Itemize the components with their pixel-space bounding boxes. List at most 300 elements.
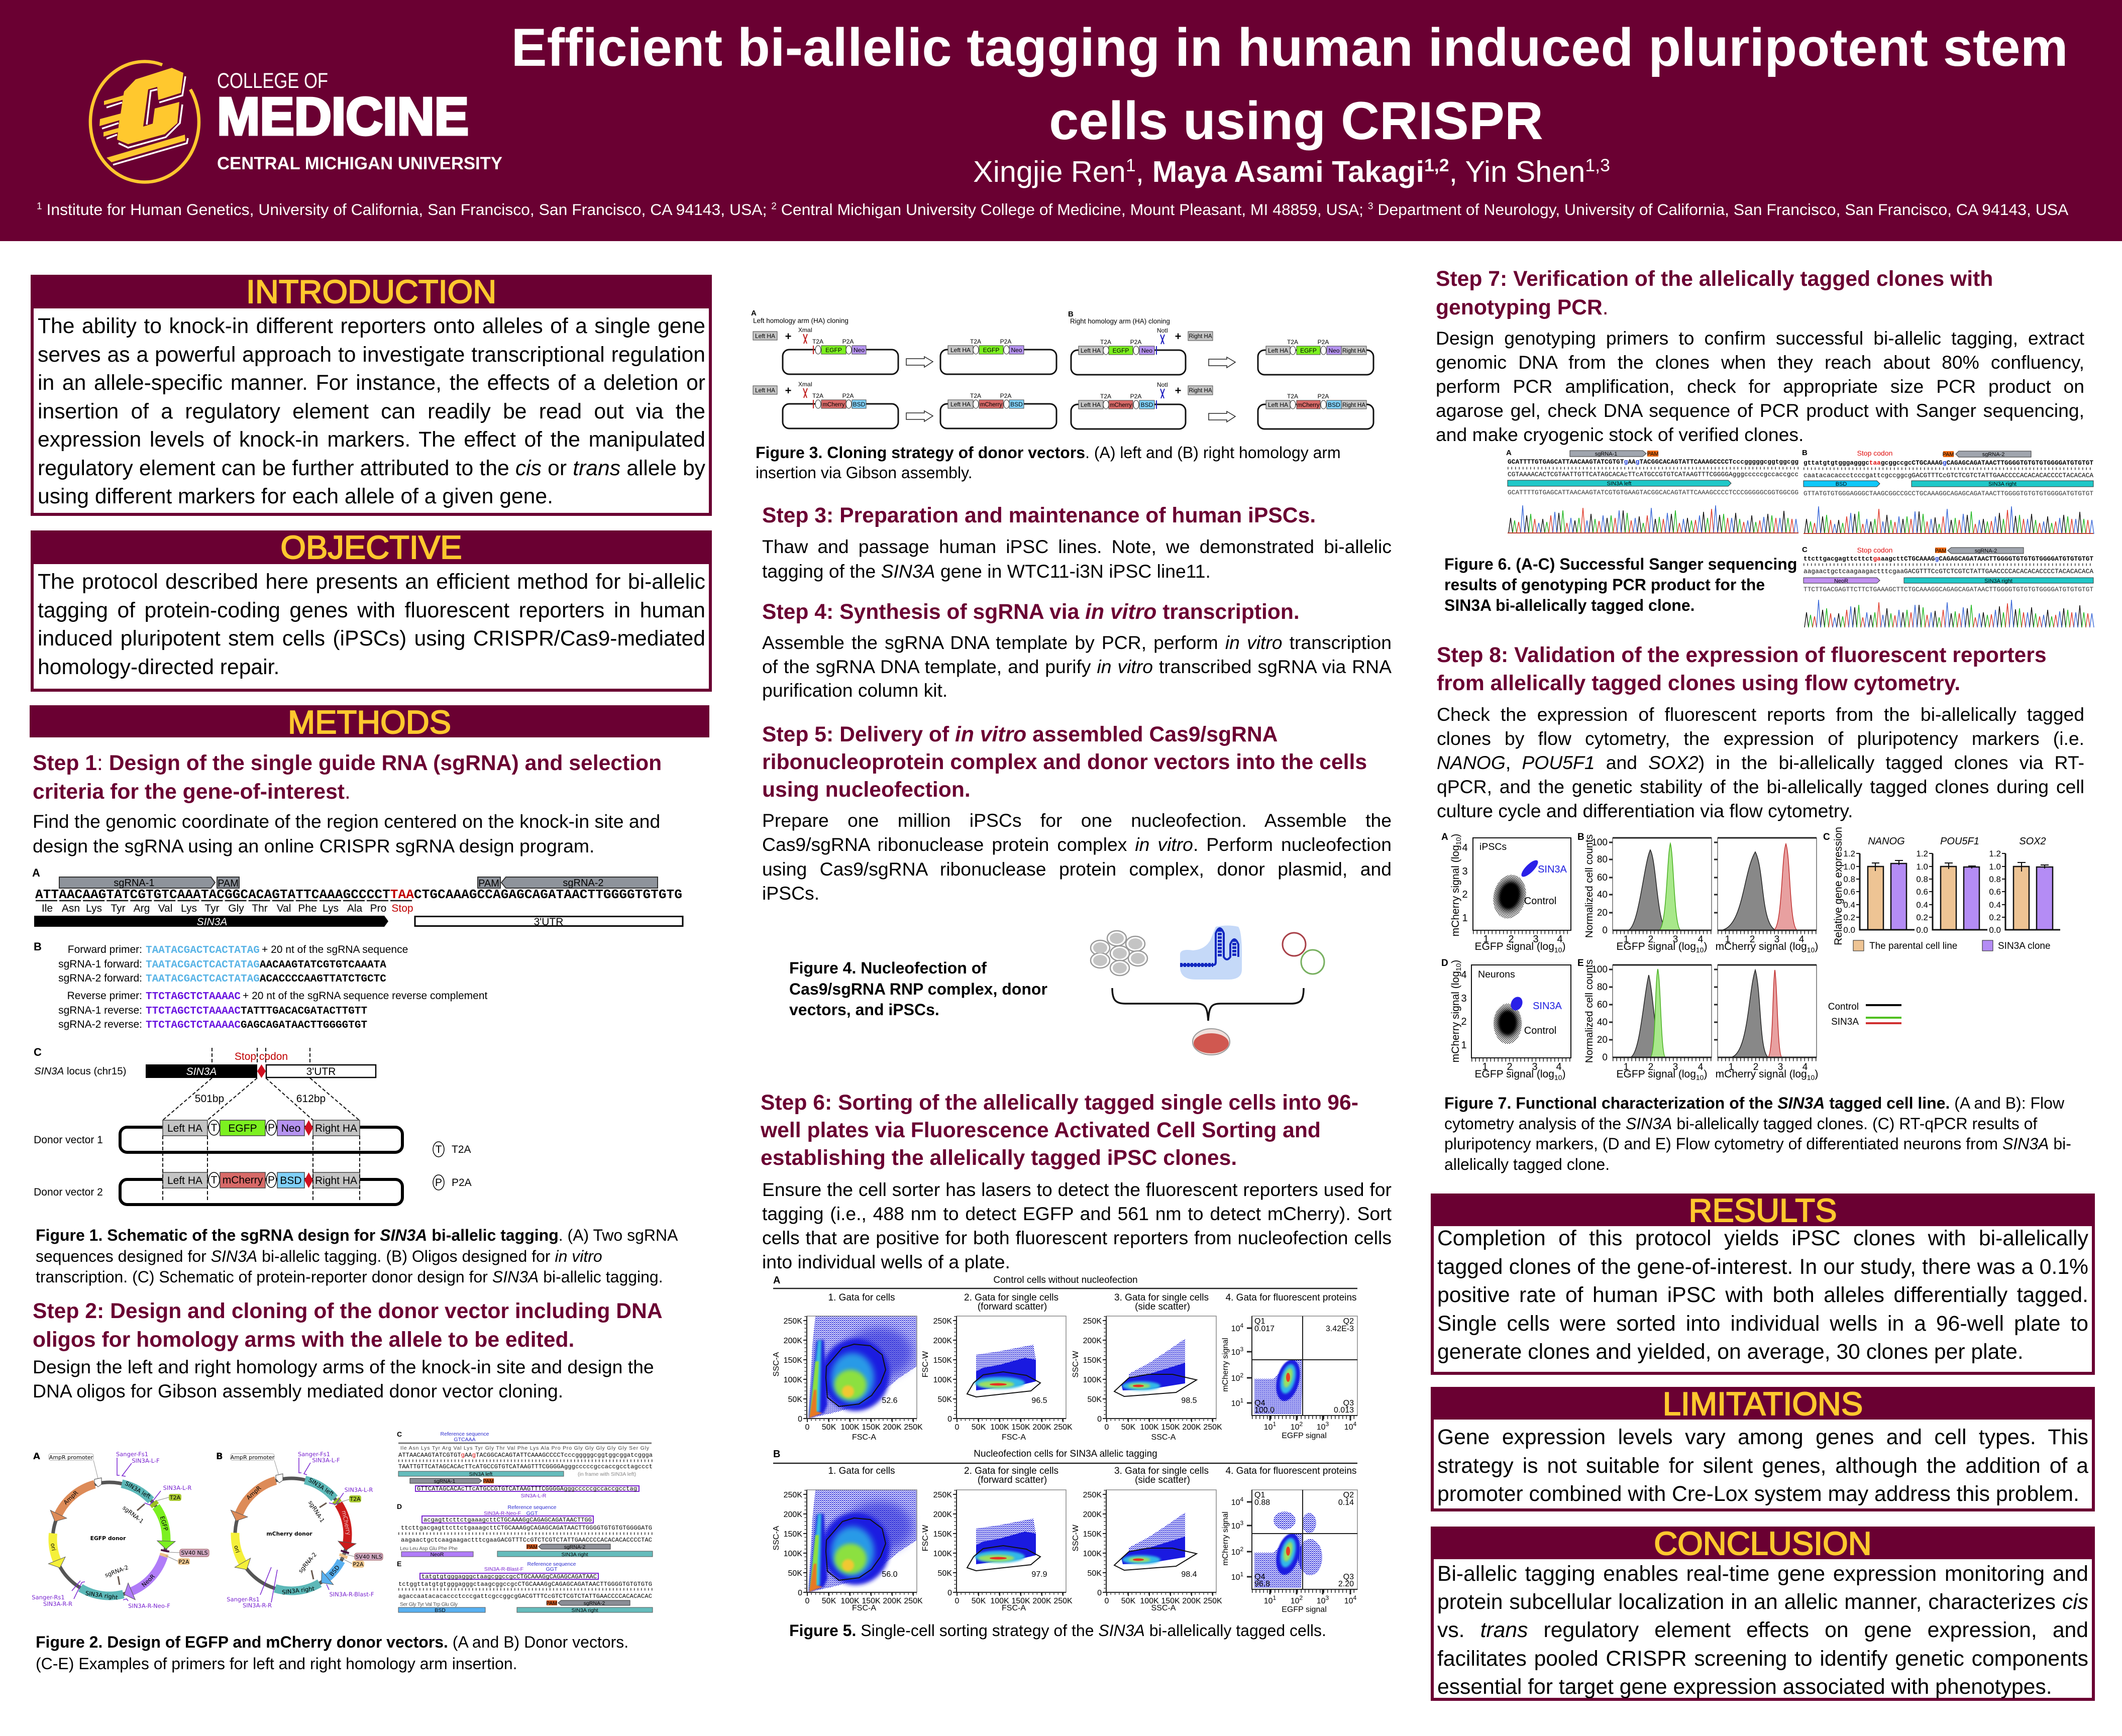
plot: single cells side scatter: 0 (1097, 1415, 1102, 1424)
panel C: NeoR junction: NeoR (1834, 578, 1848, 584)
text: objective body: induced pluripotent stem cells (iPSCs) using CRISPR/Cas9-mediated (38, 626, 705, 650)
panel E: neuron histograms: 80 (1597, 982, 1608, 993)
text: step 4 (762, 631, 1392, 702)
plasmid A: EGFP donor: sgRNA-1 (121, 1504, 145, 1525)
text: step 7 (1436, 326, 2084, 447)
panel A: control cells: 4. Gata for fluorescent proteins (1226, 1292, 1356, 1303)
panel D: NeoR right arm primer: ttcttgacgagttcttctgaaagcttCTGCAAAGgCAGAGCAGATAACTTGGGGTGTGTGTGGGGATG (401, 1525, 652, 1532)
panel A: left homology arm cloning: Left homology arm (HA) cloning (753, 317, 848, 324)
plot: single cells side scatter (1072, 1316, 1222, 1442)
panel C: left arm primer: SIN3A-L-R (521, 1493, 547, 1499)
panel A: sgRNA target sequence: Val (158, 903, 172, 914)
text: conclusion body: essential for target gene expression associated with phenotypes. (1437, 1675, 2052, 1699)
panel C: RT-qPCR bars: 0.2 (1916, 913, 1928, 922)
panel C: NeoR junction: C (1802, 546, 1808, 554)
panel E: BSD right arm primer: Reference sequence (527, 1561, 576, 1567)
panel E: BSD right arm primer: PAM (546, 1600, 557, 1606)
panel B: mCherry row: BSD (1328, 401, 1340, 408)
panel C: RT-qPCR bars: 1.2 (1989, 849, 2001, 858)
panel B: mCherry row: Left HA (1081, 401, 1101, 408)
plot: fluorescent proteins gate: 3 (1326, 1421, 1329, 1428)
panel E: neuron histograms (1577, 958, 1818, 1081)
title: Efficient bi-allelic tagging in human induced pluripotent stem (511, 17, 2068, 77)
caption: figure 3 (756, 443, 1341, 483)
heading: step 5: ribonucleoprotein complex and donor vectors into the cells (762, 750, 1367, 774)
plot: single cells forward scatter: 150K (933, 1530, 952, 1539)
plot: gate for cells: 250K (904, 1423, 923, 1432)
plot: single cells forward scatter: 100K (933, 1376, 952, 1384)
text: step 6: cells that are positive for both fluorescent reporters from nucleofection cells (762, 1227, 1392, 1248)
panel A: sgRNA target sequence: sgRNA-1 (114, 878, 155, 889)
plot: single cells forward scatter: 50K (972, 1597, 986, 1605)
plasmid B: mCherry donor: mCherry (341, 1510, 353, 1536)
plasmid B: mCherry donor: ori (233, 1545, 242, 1554)
panel A: mCherry row: XmaI (798, 381, 812, 388)
panel A: iPSC flow scatter: 3 (1462, 866, 1468, 877)
legend: control and SIN3A lines: Control (1828, 1002, 1859, 1012)
text: conclusion body: vs. trans regulatory element effects on gene expression, and (1437, 1618, 2088, 1642)
caption: figure 5: Figure 5. Single-cell sorting strategy of the SIN3A bi-allelically tagged cells. (789, 1621, 1326, 1640)
plot: fluorescent proteins gate: 10 (1317, 1423, 1326, 1432)
panel D: NeoR right arm primer (397, 1502, 653, 1558)
text: step 5 (762, 808, 1392, 906)
panel D: NeoR right arm primer: SIN3A right (561, 1552, 588, 1558)
plasmid A: EGFP donor: AmpR promoter (49, 1454, 93, 1461)
heading: step 6 (761, 1089, 1358, 1172)
panel A: left homology arm cloning: Neo (1011, 347, 1022, 354)
panel C: NeoR junction: aagaactgctcaagaagactttcgaaGACGTTTCcGTCTCGTCTATTGAACCCCACACACACCCCTACACACACA (1803, 568, 2093, 575)
panel A: mCherry row: mCherry (980, 402, 1002, 408)
plot: single cells forward scatter: 50K (938, 1395, 952, 1404)
plasmid B: mCherry donor: AmpR promoter (231, 1454, 275, 1461)
plasmid A: EGFP donor: A (33, 1451, 40, 1462)
legend: T2A and P2A: P (435, 1177, 442, 1188)
panel A: iPSC flow scatter: 4 (1557, 934, 1563, 945)
text: step 3: tagging of the SIN3A gene in WTC11-i3N iPSC line11. (762, 561, 1211, 582)
panel: conclusion (1431, 1527, 2095, 1701)
text: results body: generate clones and yielded, on average, 30 clones per plate. (1437, 1340, 2024, 1364)
plot: single cells side scatter: 100K (1083, 1376, 1102, 1384)
panel A: sgRNA target sequence: Arg (134, 903, 150, 914)
caption: figure 3: Figure 3. Cloning strategy of donor vectors. (A) left and (B) right homology arm (756, 444, 1341, 462)
text: limitations body: strategy is not suitable for silent genes, although the addition of a (1437, 1454, 2088, 1478)
panel B: iPSC histograms: 40 (1597, 890, 1608, 900)
panel A: sgRNA target sequence: Tyr (204, 903, 220, 914)
panel B: BSD junction: SIN3A right (1988, 481, 2017, 487)
plot: gate for cells: 250K (904, 1597, 923, 1605)
plasmid B: mCherry donor: B (216, 1451, 223, 1462)
panel C: RT-qPCR bars: 1.0 (1989, 862, 2001, 872)
plot: single cells side scatter: 150K (1083, 1530, 1102, 1539)
panel: results (1431, 1194, 2095, 1375)
panel A: control cells: 3. Gata for single cells (1114, 1292, 1209, 1303)
panel A: left homology arm cloning: P2A (1000, 338, 1011, 345)
header banner (0, 0, 2122, 241)
panel B: right homology arm cloning: + (1175, 330, 1181, 343)
panel C: RT-qPCR bars: 0.0 (1916, 925, 1928, 935)
panel C: left arm primer: ATTAACAAGTATCGTGTgAAgTACGGCACAGTATTCAAAGCCCCTcccgggggcggtggcggatcggga (398, 1452, 653, 1459)
plot: fluorescent proteins gate: 2 (1240, 1372, 1244, 1379)
panel A: left homology arm cloning: P2A (842, 338, 854, 345)
plasmid B: mCherry donor: SIN3A right (281, 1585, 315, 1596)
plasmid B: mCherry donor: SIN3A left (307, 1476, 336, 1497)
panel D: NeoR right arm primer: Reference sequence (508, 1504, 557, 1510)
panel B: mCherry row: mCherry (1110, 402, 1132, 408)
panel C: NeoR junction: PAM (1935, 548, 1947, 554)
panel A: iPSC flow scatter: A (1441, 832, 1448, 842)
donor vector 2 (34, 1136, 402, 1205)
panel D: neuron flow scatter: 4 (1556, 1061, 1562, 1072)
panel C: RT-qPCR bars: The parental cell line (1869, 941, 1957, 951)
plot: gate for cells: 0 (805, 1597, 810, 1605)
panel C: SIN3A locus: Stop codon (235, 1051, 288, 1062)
panel B: right homology arm cloning: Right homology arm (HA) cloning (1070, 317, 1170, 325)
heading: objective: OBJECTIVE (280, 529, 462, 566)
text: step 8: culture cycle and differentiation via flow cytometry. (1437, 800, 1853, 821)
plot: gate for cells: 200K (784, 1337, 802, 1345)
panel A: sgRNA target sequence: Stop (391, 903, 413, 914)
caption: figure 6: Figure 6. (A-C) Successful Sanger sequencing (1444, 555, 1797, 573)
plot: gate for cells: 100K (784, 1376, 802, 1384)
text: step 5: Prepare one million iPSCs for one nucleofection. Assemble the (762, 810, 1392, 831)
panel D: neuron flow scatter: 4 (1461, 969, 1467, 981)
plot: gate for cells: 250K (784, 1491, 802, 1499)
panel A: control cells: (side scatter) (1135, 1301, 1190, 1312)
panel D: NeoR right arm primer: aagaactgctcaagaagactttcgaaGACGTTTCcGTCTCGTCTATTGAACCCCACACACACCCCTAC (401, 1537, 652, 1544)
panel: objective (31, 530, 712, 692)
panel B: iPSC histograms (1577, 832, 1818, 954)
plot: gate for cells: 250K (784, 1317, 802, 1326)
panel C: NeoR junction: SIN3A right (1984, 578, 2012, 584)
plot: single cells forward scatter: 96.5 (1031, 1396, 1047, 1405)
panel D: neuron flow scatter: 1 (1482, 1061, 1488, 1072)
plot: gate for cells: 100K (784, 1550, 802, 1558)
panel B: right homology arm cloning (1068, 310, 1373, 375)
panel C: RT-qPCR bars: C (1823, 832, 1830, 842)
plot: fluorescent proteins gate: mCherry signal (1221, 1338, 1230, 1392)
panel C: RT-qPCR bars: 1.2 (1916, 849, 1928, 858)
caption: figure 4: vectors, and iPSCs. (789, 1001, 939, 1019)
panel C: RT-qPCR bars: 0.8 (1989, 875, 2001, 884)
panel E: BSD right arm primer: SIN3A-R-Blast-F (484, 1566, 523, 1572)
plot: single cells forward scatter: FSC-A (1002, 1433, 1026, 1442)
panel D: NeoR right arm primer: SIN3A-R-Neo-F (484, 1510, 521, 1516)
logo: Central Michigan University College of Medicine (88, 60, 502, 184)
caption: figure 6: results of genotyping PCR product for the (1444, 576, 1765, 594)
panel A: iPSC flow scatter: 4 (1462, 842, 1468, 853)
plot: fluorescent proteins gate: 0.017 (1254, 1325, 1275, 1333)
plot: single cells forward scatter: 150K (1011, 1597, 1030, 1605)
panel E: neuron histograms: ) (1815, 1068, 1818, 1080)
panel A: mCherry row: P2A (842, 392, 854, 399)
caption: figure 7: cytometry analysis of the SIN3A bi-allelically tagged clones. (C) RT-qPCR results of (1444, 1114, 2037, 1132)
text: step 3 (762, 534, 1392, 583)
panel D: neuron flow scatter: mCherry signal (log (1450, 971, 1461, 1062)
text: introduction body: regulatory element can be further attributed to the cis or trans allele by (38, 456, 705, 480)
panel B: BSD junction (1802, 449, 2094, 534)
panel B: right homology arm cloning: P2A (1318, 339, 1329, 346)
plasmid A: EGFP donor: SIN3A-R-R (43, 1600, 72, 1607)
panel A: mCherry row: P2A (1000, 392, 1011, 399)
plot: single cells forward scatter (921, 1316, 1073, 1442)
panel B: iPSC histograms: EGFP signal (log (1617, 941, 1696, 952)
panel A: mCherry row: BSD (853, 401, 866, 408)
plot: single cells side scatter: 98.4 (1181, 1570, 1197, 1579)
plot: single cells forward scatter: 200K (1032, 1423, 1051, 1432)
text: results body: positive rate of human iPSC with both alleles differentially tagged. (1437, 1283, 2088, 1307)
plasmid A: EGFP donor: SIN3A-L-R (163, 1484, 191, 1491)
plasmid B: mCherry donor (216, 1451, 383, 1609)
panel D: neuron flow scatter: EGFP signal (log (1475, 1068, 1554, 1080)
heading: step 2: oligos for homology arms with the allele to be edited. (33, 1328, 574, 1352)
panel A: control cells: 1. Gata for cells (828, 1292, 895, 1303)
panel E: neuron histograms: 0 (1602, 1052, 1608, 1063)
panel A: iPSC flow scatter (1441, 832, 1571, 954)
plot: gate for cells: 56.0 (882, 1570, 898, 1579)
panel D: NeoR right arm primer: sgRNA-2 (564, 1544, 585, 1550)
panel C: left arm primer: C (397, 1430, 402, 1438)
panel B: BSD junction: sgRNA-2 (1982, 452, 2004, 458)
donor vector 1: Right HA (315, 1123, 357, 1134)
text: step 6: tagging (i.e., 488 nm to detect EGFP and 561 nm to detect mCherry). Sort (762, 1203, 1392, 1224)
panel A: SIN3A left junction: PAM (1647, 451, 1659, 457)
text: step 3: Thaw and passage human iPSC lines. Note, we demonstrated bi-allelic (762, 536, 1392, 557)
curly brace (1112, 988, 1304, 1021)
plot: single cells side scatter: 200K (1083, 1337, 1102, 1345)
panel B: iPSC histograms: 10 (1807, 946, 1815, 954)
text: step 7: and make cryogenic stock of verified clones. (1436, 424, 1803, 445)
plot: single cells forward scatter: 200K (933, 1337, 952, 1345)
donor vector 1: Left HA (167, 1123, 202, 1134)
panel B: mCherry row: P2A (1318, 393, 1329, 400)
panel D: NeoR right arm primer: GGT (526, 1510, 538, 1516)
panel C: RT-qPCR bars: 0.6 (1989, 887, 2001, 897)
panel C: RT-qPCR bars: 0.2 (1843, 913, 1855, 922)
heading: step 7 (1436, 265, 1993, 322)
plot: single cells side scatter: 50K (1088, 1395, 1102, 1404)
panel C: NeoR junction: Stop codon (1857, 546, 1892, 554)
panel E: BSD right arm primer: BSD (435, 1607, 446, 1613)
panel B: nucleofection cells: 1. Gata for cells (828, 1466, 895, 1476)
panel B: oligo primers: sgRNA-1 forward: (58, 958, 142, 970)
plot: single cells side scatter: 150K (1161, 1423, 1180, 1432)
panel B: iPSC histograms: B (1577, 832, 1584, 842)
text: step 6 (762, 1177, 1392, 1274)
panel A: control cells: 2. Gata for single cells (964, 1292, 1058, 1303)
panel E: neuron histograms: 4 (1802, 1062, 1808, 1072)
panel B: mCherry row: NotI (1157, 381, 1168, 388)
plasmid A: EGFP donor: P2A (178, 1559, 189, 1565)
panel A: sgRNA target sequence: Ile (42, 903, 53, 914)
panel B: right homology arm cloning: B (1068, 310, 1074, 318)
panel B: nucleofection cells: (side scatter) (1135, 1475, 1190, 1485)
panel A: SIN3A left junction: A (1506, 449, 1512, 457)
panel A: left homology arm cloning: XmaI (798, 327, 812, 334)
caption: figure 1 (36, 1225, 678, 1288)
heading: limitations: LIMITATIONS (1663, 1385, 1863, 1422)
panel C: left arm primer: GTCAAA (454, 1437, 476, 1443)
legend: T2A and P2A: P2A (452, 1177, 472, 1188)
panel B: iPSC histograms: 60 (1597, 873, 1608, 883)
panel A: iPSC flow scatter: Control (1524, 896, 1556, 907)
plot: single cells forward scatter: 100K (990, 1597, 1009, 1605)
panel B: oligo primers: sgRNA-2 reverse: (58, 1019, 142, 1030)
panel D: neuron flow scatter: 3 (1461, 993, 1467, 1004)
panel A: SIN3A left junction (1506, 449, 1798, 533)
panel C: RT-qPCR bars: NANOG (1868, 836, 1905, 847)
plot: fluorescent proteins gate: Q2 (1343, 1317, 1354, 1326)
panel A: sgRNA target sequence: Lys (86, 903, 102, 914)
panel B: BSD junction: gttatgtgtgggagggctaagcggccgcCTGCAAAGgCAGAGCAGATAACTTGGGGTGTGTGTGGGGATGTGTGT (1803, 459, 2093, 467)
panel B: nucleofection cells: 4. Gata for fluorescent proteins (1226, 1466, 1356, 1476)
panel C: NeoR junction (1802, 546, 2094, 627)
panel A: mCherry row: T2A (970, 392, 981, 399)
plot: single cells side scatter: 98.5 (1181, 1396, 1197, 1405)
plot: fluorescent proteins gate: Q2 (1343, 1491, 1354, 1499)
plasmid B: mCherry donor: SIN3A-L-F (312, 1457, 340, 1464)
panel C: left arm primer: TAATTGTTCATAGCACAcTTcATGCCGTGTCATAAGTTTCGGGGAgggcccccgccaccgcctagccct (398, 1463, 653, 1470)
plot: single cells forward scatter: 250K (1053, 1597, 1073, 1605)
plot: single cells side scatter: 150K (1083, 1356, 1102, 1365)
plot: single cells side scatter: 250K (1203, 1597, 1222, 1605)
panel E: neuron histograms: mCherry signal (log (1716, 1068, 1807, 1080)
plot: single cells side scatter: 0 (1097, 1589, 1102, 1597)
caption: figure 7 (1444, 1093, 2071, 1174)
plasmid A: EGFP donor: ori (49, 1543, 57, 1551)
text: step 8: Check the expression of fluorescent reports from the bi-allelically tagged (1437, 704, 2084, 725)
text: step 2 (33, 1355, 654, 1403)
panel A: iPSC flow scatter: SIN3A (1538, 864, 1567, 875)
panel C: left arm primer: Reference sequence (441, 1431, 489, 1437)
heading: step 8: from allelically tagged clones using flow cytometry. (1437, 671, 1960, 695)
panel C: RT-qPCR bars: POU5F1 (1940, 836, 1979, 847)
panel A: left homology arm cloning (751, 309, 1056, 374)
panel E: BSD right arm primer: sgRNA-2 (584, 1600, 605, 1606)
text: results body (1437, 1224, 2088, 1366)
figure 1: sgRNA design schematic (30, 866, 693, 1223)
panel A: iPSC flow scatter: 3 (1533, 934, 1539, 945)
panel C: left arm primer: PAM (483, 1478, 494, 1484)
panel A: mCherry row: T2A (812, 392, 823, 399)
plot: fluorescent proteins gate: 10 (1231, 1522, 1240, 1531)
panel B: right homology arm cloning: Left HA (1268, 347, 1288, 354)
plasmid A: EGFP donor: SIN3A right (85, 1589, 119, 1601)
plasmid B: mCherry donor: AmpR (245, 1484, 263, 1501)
panel B: BSD junction: caatacacaccctcccgattcgccggcgGACGTTTCcGTCTCGTCTATTGAACCCCACACACACCCCTACACACA (1803, 472, 2093, 479)
heading: results: RESULTS (1689, 1192, 1837, 1229)
panel B: mCherry row: T2A (1100, 393, 1111, 400)
figure 4: nucleofection components (1080, 919, 1331, 1065)
plot: fluorescent proteins gate: 1 (1273, 1421, 1277, 1428)
panel D: NeoR right arm primer: acgagttcttctgaaagcttCTGCAAAGgCAGAGCAGATAACTTGG (423, 1516, 592, 1524)
panel C: SIN3A locus: 3'UTR (306, 1066, 336, 1077)
heading: step 5 (762, 721, 1367, 804)
plot: fluorescent proteins gate: 3 (1240, 1346, 1244, 1353)
plot: fluorescent proteins gate: 2 (1240, 1546, 1244, 1553)
plot: fluorescent proteins gate: 10 (1291, 1597, 1300, 1605)
panel A: control cells: (forward scatter) (978, 1301, 1047, 1312)
donor vector 1: P (268, 1122, 275, 1134)
panel B: mCherry row (1071, 381, 1373, 429)
plasmid A: EGFP donor: NeoR (140, 1573, 156, 1588)
panel B: oligo primers: B (34, 940, 42, 953)
text: step 5: iPSCs. (762, 883, 819, 904)
panel C: RT-qPCR bars: 1.0 (1843, 862, 1855, 872)
caption: figure 3: insertion via Gibson assembly. (756, 463, 973, 481)
panel A: iPSC flow scatter: 2 (1462, 889, 1468, 900)
plot: single cells forward scatter: 150K (1011, 1423, 1030, 1432)
text: step 4: of the sgRNA DNA template, and purify in vitro transcribed sgRNA via RNA (762, 656, 1392, 677)
plot: fluorescent proteins gate: Q1 (1254, 1317, 1265, 1326)
panel A: iPSC flow scatter: iPSCs (1479, 841, 1507, 852)
panel D: neuron flow scatter: 10 (1454, 963, 1462, 971)
heading: step 1: criteria for the gene-of-interest. (33, 780, 351, 804)
panel: introduction (31, 275, 712, 516)
plot: single cells forward scatter: 250K (933, 1491, 952, 1499)
panel B: oligo primers (34, 940, 488, 1031)
plasmid A: EGFP donor: AmpR (62, 1489, 79, 1506)
panel D: NeoR right arm primer: D (397, 1502, 402, 1510)
panel A: sgRNA target sequence: ATTAACAAGTATCGTGTCAAATACGGCACAGTATTCAAAGCCCCTTAACTGCAAAGCCAGAGCAGATAACTTGGGGTGTGTG (35, 887, 682, 902)
plot: gate for cells: 0 (798, 1589, 802, 1597)
panel E: neuron histograms: 10 (1807, 1073, 1815, 1081)
text: step 5: Cas9/sgRNA ribonuclease protein complex in vitro. Perform nucleofection (762, 834, 1392, 855)
heading: step 4: Step 4: Synthesis of sgRNA via in vitro transcription. (762, 600, 1300, 624)
panel D: neuron flow scatter: 2 (1461, 1016, 1467, 1027)
plasmid B: mCherry donor: sgRNA-2 (297, 1551, 318, 1574)
plasmid B: mCherry donor: SIN3A-L-R (345, 1486, 373, 1493)
plot: fluorescent proteins gate: 3 (1326, 1594, 1329, 1601)
plasmid B: mCherry donor: BSD (328, 1564, 341, 1578)
panel C: RT-qPCR bars: 0.4 (1843, 900, 1855, 910)
heading: step 6: Step 6: Sorting of the allelically tagged single cells into 96- (761, 1091, 1358, 1115)
plot: single cells forward scatter: 100K (933, 1550, 952, 1558)
panel A: iPSC flow scatter: ) (1450, 834, 1461, 837)
panel C: left arm primer (397, 1430, 653, 1499)
panel B: nucleofection cells: 2. Gata for single cells (964, 1466, 1058, 1476)
plot: gate for cells (772, 1316, 923, 1442)
plot: gate for cells: SSC-A (772, 1526, 781, 1550)
text: step 8 (1437, 702, 2084, 823)
plot: fluorescent proteins gate: Q4 (1254, 1573, 1265, 1581)
panel E: neuron histograms: 2 (1753, 1062, 1758, 1072)
plot: gate for cells: 50K (788, 1395, 802, 1404)
panel A: iPSC flow scatter: 2 (1508, 934, 1514, 945)
panel C: RT-qPCR bars: 0.4 (1916, 900, 1928, 910)
caption: figure 4: Cas9/sgRNA RNP complex, donor (789, 980, 1047, 998)
plot: fluorescent proteins gate: Q3 (1343, 1573, 1354, 1581)
panel A: iPSC flow scatter: 10 (1454, 837, 1462, 845)
plot: single cells side scatter: 150K (1161, 1597, 1180, 1605)
plot: gate for cells: 0 (798, 1415, 802, 1424)
panel B: right homology arm cloning: P2A (1130, 339, 1141, 346)
figure 7: functional characterization (1439, 829, 2092, 1085)
plot: single cells side scatter (1072, 1490, 1222, 1612)
panel B: mCherry row: T2A (1287, 393, 1298, 400)
panel D: neuron flow scatter: 3 (1532, 1061, 1538, 1072)
panel A: sgRNA target sequence: sgRNA-2 (563, 878, 604, 889)
panel A: control cells: Control cells without nucleofection (993, 1275, 1138, 1285)
panel C: SIN3A locus: 612bp (296, 1093, 326, 1105)
text: conclusion body: facilitates pooled CRISPR screening to identify genetic components (1437, 1647, 2088, 1671)
plot: fluorescent proteins gate: Q3 (1343, 1399, 1354, 1407)
plot: gate for cells: 50K (822, 1423, 836, 1432)
caption: figure 1: sequences designed for SIN3A bi-allelic tagging. (B) Oligos designed for in vitro (36, 1247, 602, 1265)
plot: single cells side scatter: SSC-W (1072, 1350, 1080, 1378)
heading: step 6: establishing the allelically tagged iPSC clones. (761, 1146, 1237, 1170)
panel B: iPSC histograms: 100 (1591, 837, 1608, 848)
panel B: mCherry row: Right HA (1342, 402, 1365, 408)
